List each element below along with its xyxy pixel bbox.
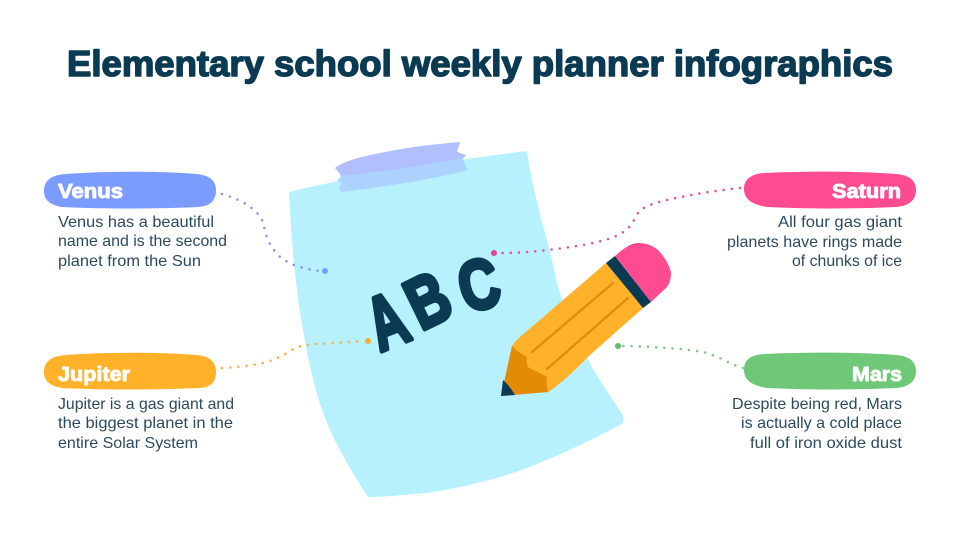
Venus description: planet from the Sun <box>58 253 201 270</box>
connector: Saturn <box>491 188 740 256</box>
ABC handwritten text <box>354 242 508 367</box>
Saturn heading: Saturn <box>832 181 901 203</box>
Jupiter description: Jupiter is a gas giant and <box>58 396 234 413</box>
panel: Mars <box>732 353 916 452</box>
Venus description: Venus has a beautiful <box>58 214 214 231</box>
title: Elementary school weekly planner infographics <box>67 43 893 84</box>
panel: Jupiter <box>44 353 234 452</box>
Saturn description <box>727 214 903 270</box>
pencil lead <box>501 380 515 396</box>
tape <box>335 142 468 192</box>
Venus description: name and is the second <box>58 233 227 250</box>
illustration: note paper with pencil <box>289 142 671 497</box>
connector: Mars <box>615 343 743 368</box>
Jupiter description: the biggest planet in the <box>58 415 233 432</box>
panel: Venus <box>44 172 227 270</box>
ABC handwritten text: A <box>354 275 420 367</box>
Venus description <box>58 214 227 270</box>
pencil <box>501 243 671 396</box>
ABC handwritten text: C <box>450 242 508 328</box>
ABC handwritten text: B <box>392 255 463 345</box>
Jupiter heading: Jupiter <box>58 364 130 386</box>
Saturn description: of chunks of ice <box>792 253 902 270</box>
Mars pill <box>744 353 916 390</box>
pencil ferrule <box>606 256 651 308</box>
Mars description: is actually a cold place <box>741 415 902 432</box>
Mars description: Despite being red, Mars <box>732 396 902 413</box>
Saturn pill <box>744 172 916 208</box>
Jupiter description <box>58 396 234 452</box>
connector: Venus <box>222 194 328 274</box>
pencil wood tip <box>501 346 548 396</box>
Jupiter pill <box>44 353 216 390</box>
Saturn description: planets have rings made <box>727 234 902 251</box>
paper sheet <box>289 151 624 497</box>
pencil eraser <box>615 243 671 302</box>
Saturn description: All four gas giant <box>778 214 903 231</box>
Mars description <box>732 396 903 452</box>
pencil grooves <box>532 283 628 369</box>
Venus pill <box>44 172 216 208</box>
panel: Saturn <box>727 172 916 270</box>
connector: Jupiter <box>222 338 371 368</box>
Jupiter description: entire Solar System <box>58 435 198 452</box>
Mars heading: Mars <box>852 364 902 386</box>
Mars description: full of iron oxide dust <box>750 435 903 452</box>
Venus heading: Venus <box>58 181 123 203</box>
pencil body <box>501 263 643 396</box>
